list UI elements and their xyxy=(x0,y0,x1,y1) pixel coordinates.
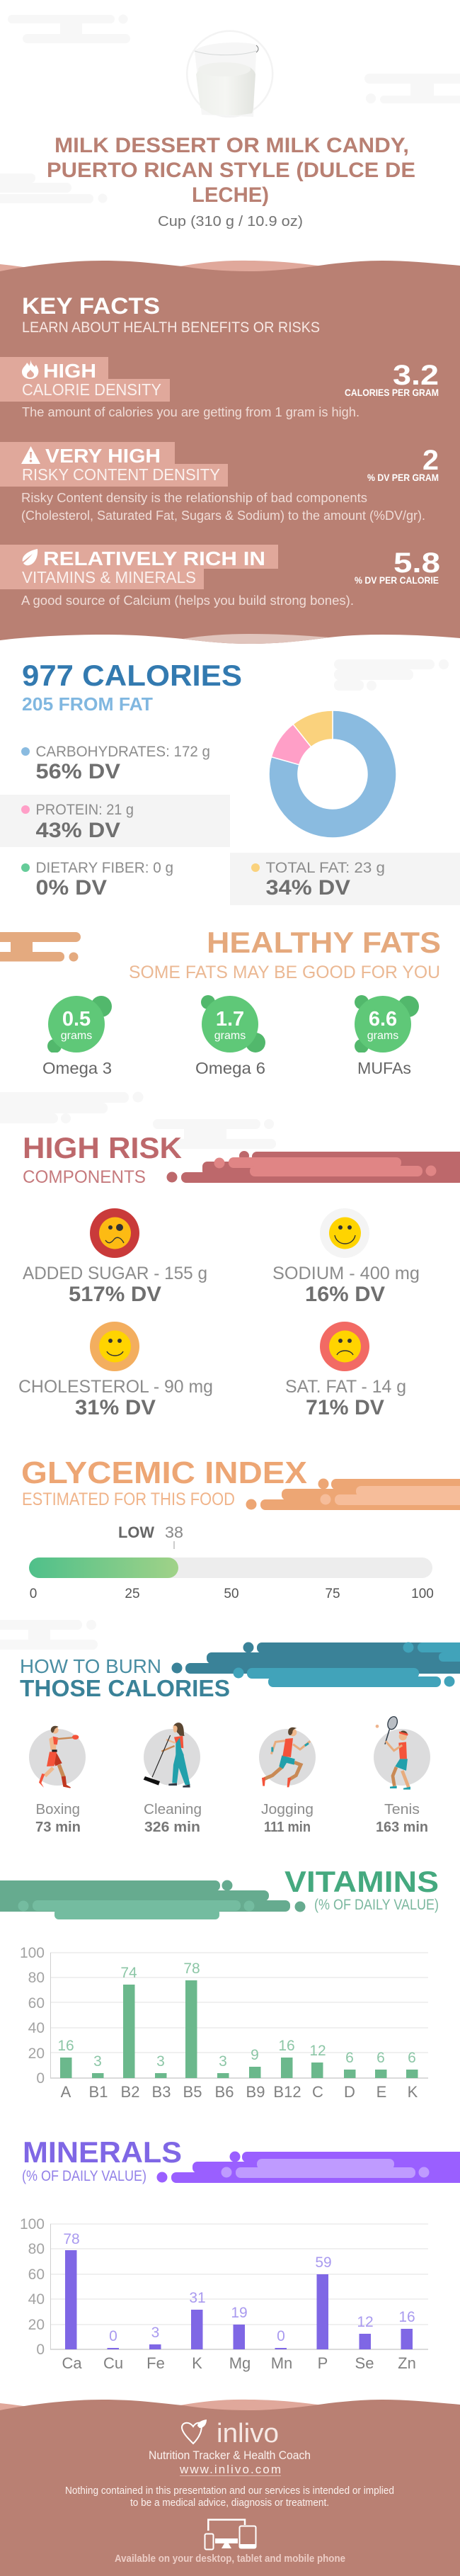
panel: how to burn xyxy=(20,1642,460,1835)
decorative bars xyxy=(0,1880,306,1919)
background cloud high risk left xyxy=(0,1092,143,1123)
bar chart: minerals: Mn xyxy=(271,2354,292,2372)
title: PUERTO RICAN STYLE (DULCE DE xyxy=(47,159,415,182)
bar chart: vitamins: 20 xyxy=(28,2046,45,2062)
icon: warning triangle xyxy=(21,446,40,464)
macro: dietary fiber: DIETARY FIBER: 0 g xyxy=(35,860,173,876)
subheading: from fat: 205 FROM FAT xyxy=(22,693,153,715)
activity: jogging: Jogging xyxy=(261,1802,314,1817)
bar chart: minerals: Se xyxy=(355,2354,374,2372)
subheading: (% OF DAILY VALUE) xyxy=(314,1897,439,1913)
fact: calorie density: The amount of calories you are getting from 1 gram is high. xyxy=(22,405,360,419)
fact: vitamins and minerals: 5.8 xyxy=(393,547,440,579)
bar chart: vitamins: 3 xyxy=(219,2053,227,2070)
bar chart: vitamins: 3 xyxy=(156,2053,165,2070)
heading: healthy fats: HEALTHY FATS xyxy=(207,926,441,959)
fact: risky content density: Risky Content density is the relationship of bad components xyxy=(21,491,367,505)
bar chart: vitamins: B9 xyxy=(246,2083,265,2101)
fat: omega 3 xyxy=(42,996,112,1077)
icon: tennis player xyxy=(376,1715,410,1790)
fact: risky content density: RISKY CONTENT DENSITY xyxy=(22,465,220,484)
bar chart: minerals: Zn xyxy=(398,2354,416,2372)
macro: carbohydrates: 56% DV xyxy=(35,760,120,783)
activity: cleaning: Cleaning xyxy=(144,1802,202,1817)
gauge bar xyxy=(29,1557,432,1578)
icon: flame xyxy=(22,360,38,379)
fact: vitamins and minerals: A good source of Calcium (helps you build strong bones). xyxy=(21,594,354,608)
bar chart: minerals xyxy=(20,2216,428,2372)
panel: healthy fats xyxy=(0,926,441,1077)
gauge scale: 100 xyxy=(411,1587,434,1601)
subheading: (% OF DAILY VALUE) xyxy=(22,2168,146,2184)
bar chart: minerals: 0 xyxy=(36,2342,45,2358)
icon: devices xyxy=(205,2520,256,2550)
fact: vitamins and minerals xyxy=(0,545,440,608)
panel: high risk components xyxy=(18,1131,460,1419)
bar chart: minerals: 3 xyxy=(151,2325,159,2341)
background cloud top left xyxy=(8,14,130,43)
decorative bars xyxy=(167,1151,460,1183)
fat: omega 3: grams xyxy=(61,1030,92,1042)
activity: tennis: Tenis xyxy=(384,1802,420,1817)
bar chart: vitamins: B1 xyxy=(89,2083,108,2101)
activity: jogging xyxy=(259,1727,316,1835)
subheading: LEARN ABOUT HEALTH BENEFITS OR RISKS xyxy=(22,319,320,336)
website: www.inlivo.com xyxy=(179,2463,281,2476)
bar chart: vitamins: K xyxy=(408,2083,418,2101)
heading: vitamins: VITAMINS xyxy=(284,1865,439,1898)
macro: dietary fiber xyxy=(21,860,173,900)
fact: risky content density: % DV PER GRAM xyxy=(367,472,439,483)
fat: omega 3: Omega 3 xyxy=(42,1059,112,1077)
bar chart: minerals: 59 xyxy=(315,2254,332,2271)
bar chart: minerals: 40 xyxy=(28,2291,45,2308)
fat: mufas: grams xyxy=(367,1030,398,1042)
icon: cleaner with broom xyxy=(144,1723,190,1788)
marker: low 38: LOW xyxy=(118,1524,154,1541)
bar chart: vitamins: B5 xyxy=(183,2083,202,2101)
bar chart: minerals: 0 xyxy=(277,2328,285,2344)
heading: minerals: MINERALS xyxy=(23,2135,182,2169)
bar chart: vitamins: C xyxy=(312,2083,323,2101)
macro: protein: 43% DV xyxy=(35,819,120,842)
bar chart: vitamins: B2 xyxy=(121,2083,139,2101)
bar chart: vitamins: 60 xyxy=(28,1995,45,2012)
disclaimer: Nothing contained in this presentation and our services is intended or implied xyxy=(65,2485,394,2497)
activity: boxing: 73 min xyxy=(35,1820,81,1835)
risk: cholesterol: CHOLESTEROL - 90 mg xyxy=(18,1377,213,1397)
macro: total fat: TOTAL FAT: 23 g xyxy=(266,860,385,876)
logo wordmark: inlivo xyxy=(217,2419,279,2449)
icon: jogger xyxy=(262,1727,310,1787)
bar chart: vitamins: 100 xyxy=(20,1945,45,1961)
risk: sodium: 16% DV xyxy=(305,1283,385,1306)
fat: mufas: MUFAs xyxy=(357,1059,411,1077)
bar chart: minerals: 100 xyxy=(20,2216,45,2232)
fact: vitamins and minerals: RELATIVELY RICH IN xyxy=(43,547,265,569)
subheading: components: COMPONENTS xyxy=(23,1167,146,1187)
fat: omega 6 xyxy=(195,995,265,1077)
bar chart: vitamins: 12 xyxy=(309,2043,326,2059)
fact: risky content density xyxy=(0,442,439,523)
bar chart: minerals: 19 xyxy=(231,2305,248,2321)
availability note: Available on your desktop, tablet and mobile phone xyxy=(115,2553,345,2565)
fat: omega 3: 0.5 xyxy=(62,1008,91,1031)
background cloud calories xyxy=(334,659,449,691)
heading: calories: 977 CALORIES xyxy=(22,659,242,692)
risk: added sugar: ADDED SUGAR - 155 g xyxy=(23,1264,207,1283)
decorative bars xyxy=(157,2152,460,2183)
fat: omega 6: Omega 6 xyxy=(195,1059,265,1077)
tagline: Nutrition Tracker & Health Coach xyxy=(149,2449,311,2462)
bar chart: vitamins: 0 xyxy=(36,2070,45,2087)
risk: sodium: SODIUM - 400 mg xyxy=(272,1264,420,1283)
bar chart: vitamins xyxy=(20,1945,428,2101)
activity: jogging: 111 min xyxy=(264,1820,311,1835)
background cloud left xyxy=(0,174,108,203)
risk: saturated fat: SAT. FAT - 14 g xyxy=(285,1377,406,1397)
bar chart: minerals: 78 xyxy=(63,2231,80,2247)
risk: saturated fat: 71% DV xyxy=(306,1396,384,1419)
fact: calorie density xyxy=(0,357,439,419)
bar chart: minerals: 31 xyxy=(189,2290,206,2306)
fat: mufas xyxy=(355,995,419,1077)
risk: cholesterol: 31% DV xyxy=(75,1396,156,1419)
background cloud burn xyxy=(0,1620,98,1650)
activity: tennis xyxy=(374,1715,430,1835)
macro: protein xyxy=(0,795,230,847)
activity: cleaning xyxy=(144,1723,202,1835)
panel: calories xyxy=(0,659,460,905)
subheading: SOME FATS MAY BE GOOD FOR YOU xyxy=(129,963,440,982)
bar chart: vitamins: 6 xyxy=(376,2050,385,2066)
bar chart: vitamins: B6 xyxy=(215,2083,234,2101)
risk: sodium xyxy=(272,1208,420,1306)
bar chart: vitamins: 6 xyxy=(345,2050,354,2066)
macro: carbohydrates xyxy=(21,744,210,783)
title: MILK DESSERT OR MILK CANDY, xyxy=(54,134,409,157)
fat: mufas: 6.6 xyxy=(369,1008,397,1031)
bar chart: vitamins: 78 xyxy=(183,1961,200,1977)
fat: omega 6: grams xyxy=(214,1030,246,1042)
background cloud top right xyxy=(364,74,460,103)
macro: carbohydrates: CARBOHYDRATES: 172 g xyxy=(35,744,210,760)
macro: total fat xyxy=(230,853,460,905)
decorative bars xyxy=(171,1642,460,1687)
macro: total fat: 34% DV xyxy=(266,876,350,900)
serving size: Cup (310 g / 10.9 oz) xyxy=(158,214,303,229)
fact: calorie density: 3.2 xyxy=(393,360,439,391)
title xyxy=(47,134,415,207)
bar chart: vitamins: 9 xyxy=(251,2047,259,2063)
donut chart xyxy=(269,710,396,838)
fact: calorie density: HIGH xyxy=(43,360,96,382)
gauge scale: 0 xyxy=(30,1587,37,1601)
risk: added sugar xyxy=(23,1208,207,1306)
fact: vitamins and minerals: % DV PER CALORIE xyxy=(355,574,439,586)
marker: low 38 xyxy=(118,1524,183,1549)
bar chart: minerals: 20 xyxy=(28,2317,45,2333)
fact: risky content density: VERY HIGH xyxy=(45,445,161,467)
macro: protein: PROTEIN: 21 g xyxy=(35,802,134,818)
risk: saturated fat xyxy=(285,1322,406,1419)
disclaimer xyxy=(65,2485,394,2509)
icon: boxer xyxy=(39,1726,79,1788)
bar chart: vitamins: 74 xyxy=(120,1965,137,1981)
background cloud high risk right xyxy=(153,1119,276,1149)
gauge scale: 75 xyxy=(325,1587,340,1601)
panel: key facts xyxy=(0,261,460,655)
bar chart: vitamins: 16 xyxy=(278,2038,295,2054)
activity: boxing: Boxing xyxy=(35,1802,80,1817)
marker: low 38: 38 xyxy=(165,1524,183,1541)
decorative bars xyxy=(0,932,81,962)
heading: high risk: HIGH RISK xyxy=(23,1131,182,1164)
bar chart: vitamins: D xyxy=(344,2083,355,2101)
bar chart: vitamins: B12 xyxy=(273,2083,301,2101)
food image: glass of milk xyxy=(187,31,272,117)
risk: added sugar: 517% DV xyxy=(69,1283,161,1306)
activity: tennis: 163 min xyxy=(376,1820,428,1835)
bar chart: vitamins: 16 xyxy=(57,2038,74,2054)
fact: calorie density: CALORIE DENSITY xyxy=(22,380,161,399)
bar chart: minerals: Ca xyxy=(62,2354,82,2372)
bar chart: vitamins: 80 xyxy=(28,1970,45,1986)
bar chart: vitamins: B3 xyxy=(152,2083,171,2101)
panel: minerals xyxy=(20,2135,460,2372)
bar chart: vitamins: E xyxy=(376,2083,386,2101)
footer xyxy=(0,2400,460,2576)
heading: key facts: KEY FACTS xyxy=(22,293,160,319)
decorative bars xyxy=(246,1479,460,1510)
bar chart: minerals: 0 xyxy=(109,2328,117,2344)
fact: calorie density: CALORIES PER GRAM xyxy=(345,387,439,398)
bar chart: minerals: P xyxy=(318,2354,328,2372)
title: LECHE) xyxy=(192,183,269,207)
macro: dietary fiber: 0% DV xyxy=(35,876,107,900)
bar chart: minerals: Cu xyxy=(103,2354,123,2372)
fact: vitamins and minerals: VITAMINS & MINERALS xyxy=(22,568,196,586)
heading: those calories: THOSE CALORIES xyxy=(20,1675,230,1701)
fact: risky content density: (Cholesterol, Saturated Fat, Sugars & Sodium) to the amount (%DV/gr). xyxy=(21,509,425,523)
activity: cleaning: 326 min xyxy=(144,1820,200,1835)
fat: omega 6: 1.7 xyxy=(216,1008,244,1031)
gauge scale: 50 xyxy=(224,1587,239,1601)
gauge scale: 25 xyxy=(125,1587,140,1601)
bar chart: minerals: 16 xyxy=(398,2309,415,2325)
bar chart: vitamins: 40 xyxy=(28,2020,45,2036)
bar chart: vitamins: 6 xyxy=(408,2050,416,2066)
disclaimer: to be a medical advice, diagnosis or treatment. xyxy=(130,2497,329,2509)
bar chart: vitamins: A xyxy=(61,2083,71,2101)
bar chart: minerals: K xyxy=(192,2354,202,2372)
panel: vitamins xyxy=(0,1865,439,2101)
panel: glycemic index xyxy=(21,1456,460,1601)
fact: risky content density: 2 xyxy=(422,445,439,476)
gauge scale xyxy=(30,1587,434,1601)
bar chart: minerals: Mg xyxy=(229,2354,251,2372)
bar chart: minerals: 60 xyxy=(28,2266,45,2283)
risk: cholesterol xyxy=(18,1322,213,1419)
heading: how to burn: HOW TO BURN xyxy=(20,1655,161,1677)
heading: glycemic index: GLYCEMIC INDEX xyxy=(21,1456,307,1490)
subheading: ESTIMATED FOR THIS FOOD xyxy=(22,1490,235,1509)
logo: heart and leaf xyxy=(182,2419,207,2444)
icon: leaf xyxy=(23,549,38,565)
activity: boxing xyxy=(29,1726,86,1835)
bar chart: minerals: 80 xyxy=(28,2241,45,2257)
bar chart: minerals: Fe xyxy=(146,2354,165,2372)
bar chart: minerals: 12 xyxy=(357,2314,374,2330)
bar chart: vitamins: 3 xyxy=(93,2053,102,2070)
